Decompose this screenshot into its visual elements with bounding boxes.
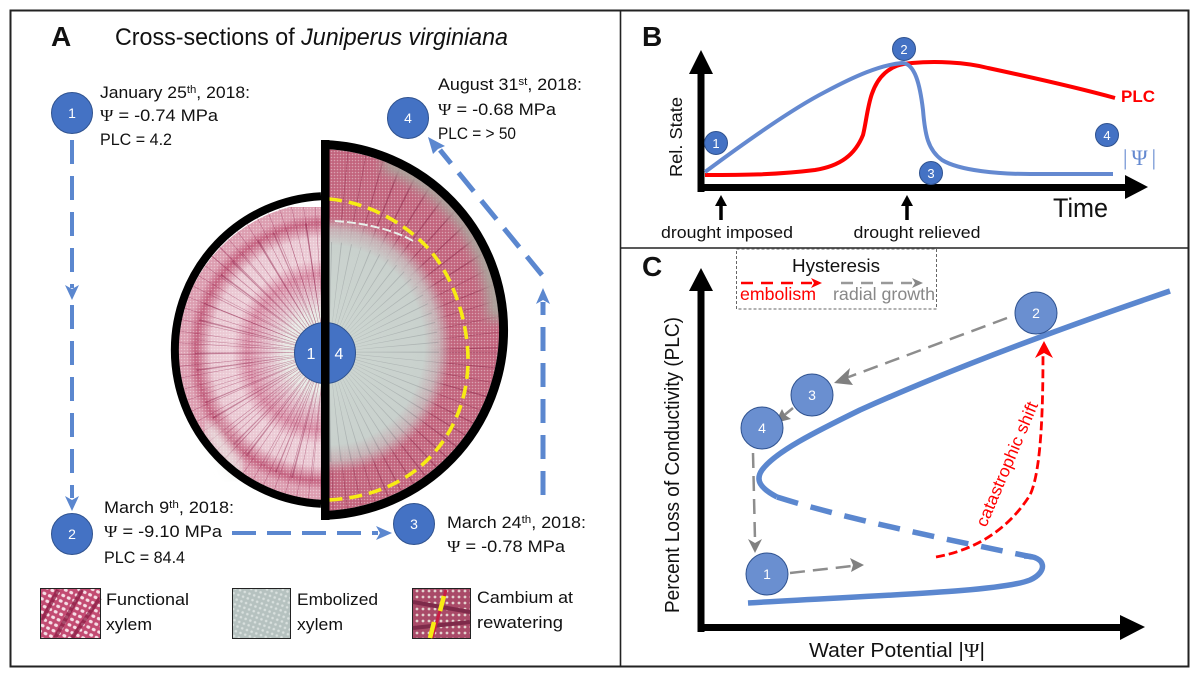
panel letter C: C — [642, 251, 662, 282]
panel letter A: A — [51, 21, 71, 52]
centre markers 1 and 4: 1 — [307, 346, 316, 363]
step 1 marker and readings: January 25 — [100, 83, 184, 102]
C marker 2 — [1015, 292, 1057, 334]
step 2 marker and readings: PLC = 84.4 — [104, 548, 185, 567]
drought relieved annotation: drought relieved — [854, 224, 980, 242]
step 2 marker and readings: Ψ = -9.10 MPa — [104, 522, 223, 541]
B marker 3: 3 — [927, 166, 935, 181]
B marker 1: 1 — [712, 136, 720, 151]
panel A: cross-sections timeline — [40, 21, 586, 638]
legend: functional xylem — [40, 588, 189, 638]
legend: cambium at rewatering: rewatering — [477, 613, 563, 632]
right half: embolized xylem section — [330, 140, 508, 520]
y axis arrow — [698, 285, 704, 632]
B marker 2: 2 — [900, 42, 908, 57]
stable lower branch — [748, 556, 1042, 603]
y axis arrow — [698, 70, 704, 192]
B marker 3 — [920, 162, 942, 184]
step 4 marker and readings: PLC = > 50 — [438, 124, 516, 143]
drought relieved annotation — [854, 195, 980, 242]
PLC label: PLC — [1121, 87, 1155, 106]
hysteresis legend box: Hysteresis — [792, 256, 880, 276]
step 1 marker and readings: th — [187, 84, 196, 96]
x axis arrow — [698, 624, 1125, 631]
step 1 marker and readings: , 2018: — [196, 83, 250, 102]
x axis label: Water Potential | Ψ| — [809, 640, 985, 662]
dashed cambium line — [329, 199, 468, 500]
B marker 2 — [892, 38, 916, 60]
arrow 1 to 2 — [65, 140, 79, 511]
radial growth arrows — [748, 318, 1007, 573]
y axis label: Percent Loss of Conductivity (PLC) — [661, 317, 684, 613]
arrow 2 to 3 — [232, 526, 392, 540]
centre markers 1 and 4 — [294, 140, 356, 520]
x axis label: Time — [1053, 193, 1108, 223]
drought imposed annotation — [661, 195, 793, 242]
PLC curve — [705, 62, 1115, 175]
unstable dashed branch — [777, 497, 1032, 557]
water potential curve — [705, 63, 1113, 174]
B marker 1 — [704, 132, 728, 154]
step 2 marker and readings: th — [169, 499, 179, 511]
step 1 marker and readings — [52, 83, 250, 149]
x axis arrow — [698, 184, 1128, 191]
panel C: hysteresis plot — [642, 249, 1170, 662]
legend: embolized xylem — [232, 588, 378, 638]
step 4 marker and readings: , 2018: — [527, 75, 582, 94]
drought imposed annotation: drought imposed — [661, 224, 793, 242]
legend: cambium at rewatering — [412, 588, 573, 638]
step 2 marker and readings: March 9 — [104, 498, 165, 517]
step 1 marker and readings: PLC = 4.2 — [100, 130, 172, 149]
hysteresis legend box: embolism — [740, 284, 816, 304]
legend: cambium at rewatering: Cambium at — [477, 588, 573, 607]
C marker 2: 2 — [1032, 305, 1040, 321]
C marker 3: 3 — [808, 387, 816, 403]
legend: embolized xylem: Embolized — [297, 590, 378, 609]
step 3 marker and readings: Ψ = -0.78 MPa — [447, 537, 566, 556]
step 3 marker and readings: th — [522, 514, 531, 526]
step 2 marker and readings: 2 — [68, 526, 76, 542]
left half: functional xylem section — [170, 192, 321, 508]
step 4 marker and readings — [388, 75, 582, 143]
catastrophic shift label: catastrophic shift — [972, 399, 1042, 530]
legend: functional xylem: xylem — [106, 615, 152, 634]
arrow 3 to 4 — [428, 137, 550, 495]
y axis label: Rel. State — [666, 97, 686, 177]
water potential label: |Ψ| — [1123, 145, 1156, 170]
step 4 marker and readings: st — [518, 76, 527, 88]
step 3 marker and readings — [394, 504, 586, 556]
legend: functional xylem: Functional — [106, 590, 189, 609]
step 4 marker and readings: August 31 — [438, 75, 515, 94]
C marker 1: 1 — [763, 566, 771, 582]
step 2 marker and readings — [52, 498, 234, 567]
divider between panel A and panels B, C — [620, 10, 1189, 667]
stable upper branch — [759, 291, 1170, 497]
B marker 4: 4 — [1103, 128, 1111, 143]
C marker 3 — [791, 374, 833, 416]
step 1 marker and readings: 1 — [68, 105, 76, 121]
step 1 marker and readings: Ψ = -0.74 MPa — [100, 106, 219, 125]
step 4 marker and readings: Ψ = -0.68 MPa — [438, 100, 557, 119]
step 3 marker and readings: 3 — [410, 516, 418, 532]
catastrophic shift arrow — [936, 341, 1053, 557]
panel letter B: B — [642, 21, 662, 52]
step 3 marker and readings: March 24 — [447, 513, 518, 532]
step 4 marker and readings: 4 — [404, 110, 412, 126]
legend: embolized xylem: xylem — [297, 615, 343, 634]
B marker 4 — [1096, 124, 1118, 146]
C marker 4: 4 — [758, 420, 766, 436]
hysteresis legend box — [736, 249, 936, 309]
step 2 marker and readings: , 2018: — [179, 498, 234, 517]
pale growth-ring line — [335, 221, 415, 242]
panel A title: Cross-sections of Juniperus virginiana — [115, 24, 508, 51]
C marker 1 — [746, 553, 788, 595]
C marker 4 — [741, 407, 783, 449]
hysteresis legend box: radial growth — [833, 284, 935, 304]
step 3 marker and readings: , 2018: — [531, 513, 586, 532]
centre markers 1 and 4: 4 — [335, 346, 344, 363]
panel B: relative state over time — [642, 21, 1156, 242]
